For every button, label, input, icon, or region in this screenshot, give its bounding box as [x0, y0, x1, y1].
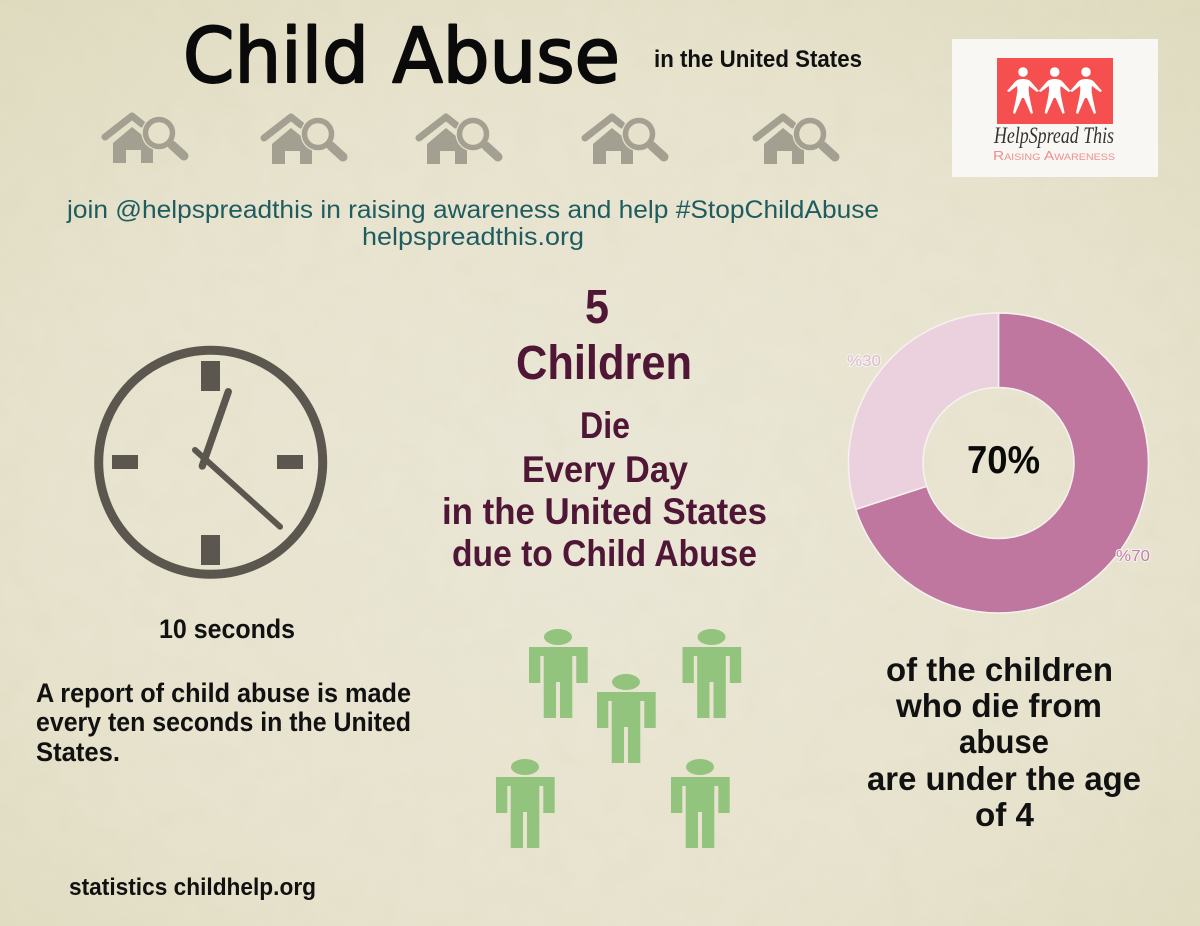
headline: 5 children: [516, 281, 692, 390]
icon: house search 2: [264, 116, 343, 164]
source note: statistics childhelp.org: [69, 874, 316, 901]
slice: 70 percent: [856, 313, 1148, 613]
call to action: join @helpspreadthis in raising awareness and help #StopChildAbuse: [66, 196, 879, 224]
text block: under the age of 4: of 4: [975, 796, 1035, 833]
text block: report every ten seconds: States.: [36, 737, 120, 767]
icon: house search 5: [756, 116, 835, 164]
logo: HelpSpreadThis: [952, 39, 1158, 177]
icon: person 3: [597, 674, 656, 763]
icon: person 1: [529, 629, 588, 718]
text block: under the age of 4: abuse: [959, 723, 1049, 760]
call to action: helpspreadthis.org: [362, 223, 584, 251]
text block: report every ten seconds: [36, 678, 411, 767]
logo: HelpSpreadThis: Raising Awareness: [993, 148, 1115, 163]
icon row: house search: [105, 116, 835, 164]
logo: HelpSpreadThis: HelpSpread This: [993, 123, 1114, 148]
center value: 70%: [967, 439, 1040, 482]
label: 30 percent: %30: [847, 353, 881, 370]
text block: die every day: Every Day: [522, 449, 688, 490]
subtitle: in the United States: [654, 46, 862, 73]
label: 70 percent: %70: [1116, 548, 1150, 565]
headline: 5 children: Children: [516, 337, 692, 390]
text block: under the age of 4: [867, 651, 1141, 833]
text block: die every day: [442, 405, 767, 574]
slice: 30 percent: [848, 313, 998, 509]
text block: report every ten seconds: A report of child abuse is made: [36, 678, 411, 708]
donut chart: 70 percent: [847, 313, 1150, 613]
headline: 5 children: 5: [585, 281, 609, 334]
icon: person 4: [496, 759, 555, 848]
title: Child Abuse: [183, 11, 620, 100]
stat heading: 10 seconds: 10 seconds: [159, 614, 295, 644]
pictogram: five children: [496, 629, 741, 848]
text block: under the age of 4: are under the age: [867, 760, 1141, 797]
text block: under the age of 4: of the children: [886, 651, 1113, 688]
clock icon: [99, 350, 323, 574]
call to action: [66, 196, 879, 251]
icon: house search 4: [585, 116, 664, 164]
text block: report every ten seconds: every ten seconds in the United: [36, 707, 411, 737]
icon: house search 1: [105, 116, 184, 163]
text block: die every day: Die: [580, 405, 630, 446]
icon: person 2: [682, 629, 741, 718]
text block: under the age of 4: who die from: [895, 687, 1102, 724]
icon: house search 3: [419, 116, 498, 164]
text block: die every day: due to Child Abuse: [452, 533, 757, 574]
icon: person 5: [671, 759, 730, 848]
text block: die every day: in the United States: [442, 491, 767, 532]
